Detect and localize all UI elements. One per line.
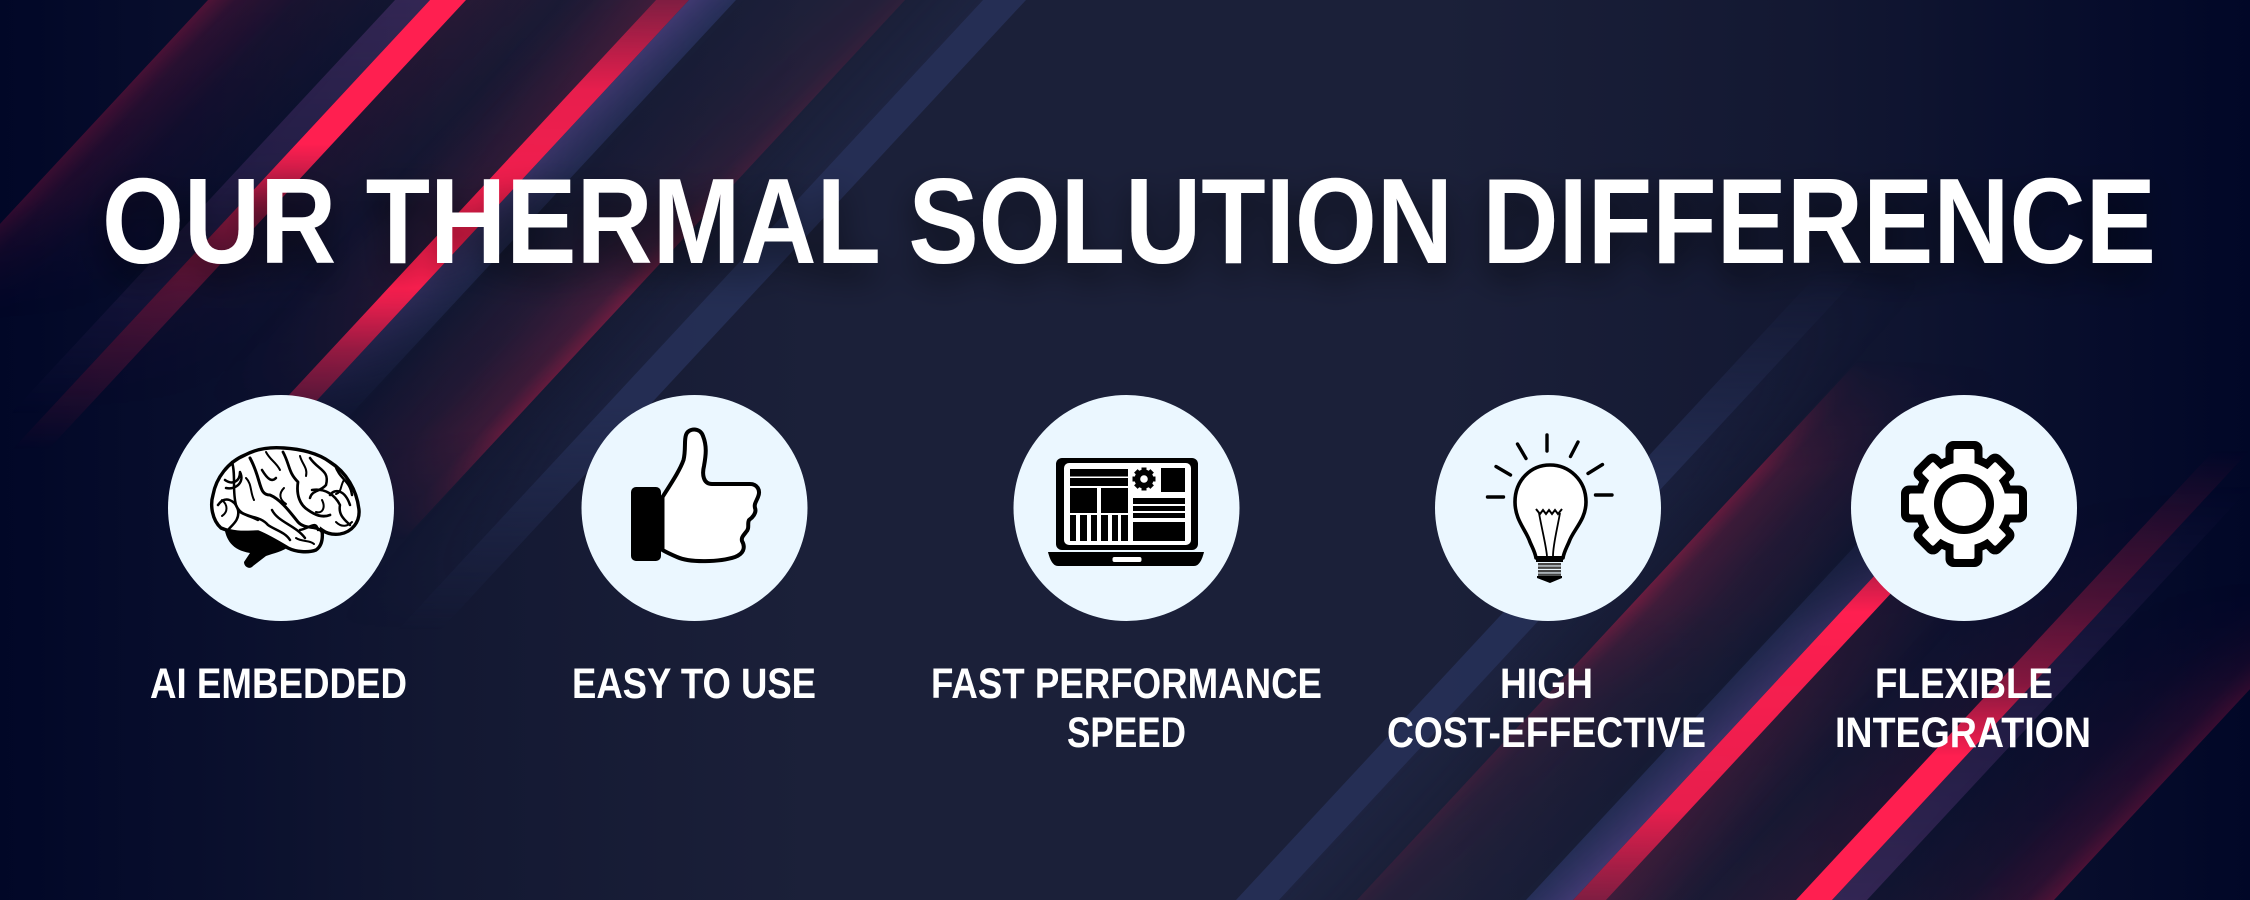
- icon circle: fast performance speed: [1014, 395, 1240, 621]
- icon circle: AI embedded: [168, 395, 394, 621]
- feature: fast performance speed: [931, 395, 1322, 757]
- label: flexible integration: FLEXIBLE: [1875, 660, 2053, 708]
- label: flexible integration: [1835, 660, 2091, 757]
- label: easy to use: EASY TO USE: [572, 660, 816, 708]
- icon circle: high cost-effective: [1435, 395, 1661, 621]
- feature: AI embedded: [150, 395, 407, 708]
- label: fast performance speed: [931, 660, 1322, 757]
- icon circle: easy to use: [582, 395, 808, 621]
- label: high cost-effective: HIGH: [1500, 660, 1593, 708]
- label: flexible integration: INTEGRATION: [1835, 709, 2091, 757]
- label: high cost-effective: COST-EFFECTIVE: [1387, 709, 1706, 757]
- icon: gear: [1909, 449, 2019, 559]
- label: fast performance speed: FAST PERFORMANCE: [931, 660, 1322, 708]
- feature: easy to use: [572, 395, 816, 708]
- icon: laptop dashboard: [1048, 458, 1204, 566]
- label: AI embedded: AI EMBEDDED: [150, 660, 407, 708]
- icon: brain: [212, 448, 359, 568]
- icon: light bulb: [1488, 435, 1612, 583]
- label: high cost-effective: [1387, 660, 1706, 757]
- icon: thumbs up: [631, 430, 759, 561]
- label: fast performance speed: SPEED: [1067, 709, 1186, 757]
- feature: high cost-effective: [1387, 395, 1706, 757]
- feature: flexible integration: [1835, 395, 2091, 757]
- icon circle: flexible integration: [1851, 395, 2077, 621]
